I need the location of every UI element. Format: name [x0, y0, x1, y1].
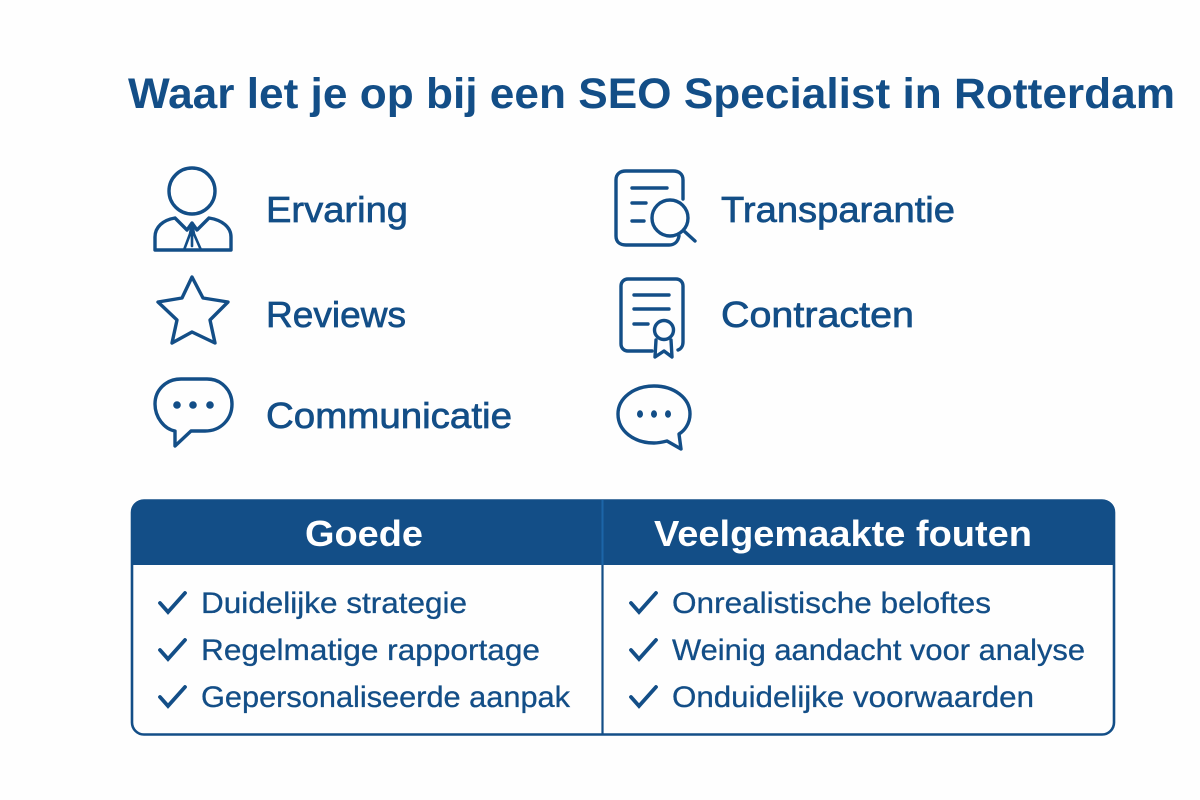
column: Goede list	[160, 587, 571, 714]
item: Duidelijke strategie: Duidelijke strategie	[201, 587, 467, 620]
icon: person	[155, 168, 231, 250]
heading: Veelgemaakte fouten: Veelgemaakte fouten	[654, 513, 1032, 554]
item: Onduidelijke voorwaarden: Onduidelijke voorwaarden	[672, 681, 1034, 714]
check 2	[631, 640, 656, 659]
icon: speech bubble right	[618, 386, 690, 449]
table outline	[132, 500, 1114, 734]
check 3	[631, 687, 656, 706]
item: Weinig aandacht voor analyse: Weinig aandacht voor analyse	[672, 634, 1085, 667]
label: Communicatie: Communicatie	[266, 395, 512, 436]
table header bar	[131, 500, 1115, 565]
column: Veelgemaakte fouten list	[631, 587, 1085, 714]
check 1	[631, 593, 656, 612]
check 2	[160, 640, 185, 659]
item: Regelmatige rapportage: Regelmatige rapportage	[201, 634, 540, 667]
icon: speech bubble left	[155, 379, 232, 446]
icon: contract with seal	[621, 279, 683, 357]
label: Reviews: Reviews	[266, 294, 406, 335]
check 3	[160, 687, 185, 706]
item: Gepersonaliseerde aanpak: Gepersonaliseerde aanpak	[201, 681, 571, 714]
comparison table	[131, 500, 1115, 735]
icon: star	[158, 277, 228, 343]
label: Ervaring: Ervaring	[266, 189, 408, 230]
check 1	[160, 593, 185, 612]
column divider body	[601, 565, 604, 735]
icon: document with magnifier	[616, 171, 695, 245]
label: Transparantie: Transparantie	[721, 189, 955, 230]
column divider header	[602, 500, 604, 565]
heading: Goede: Goede	[305, 513, 423, 554]
item: Onrealistische beloftes: Onrealistische beloftes	[672, 587, 991, 620]
label: Contracten: Contracten	[721, 294, 914, 335]
title: Waar let je op bij een SEO Specialist in Rotterdam	[128, 70, 1175, 118]
criteria grid	[155, 168, 955, 449]
